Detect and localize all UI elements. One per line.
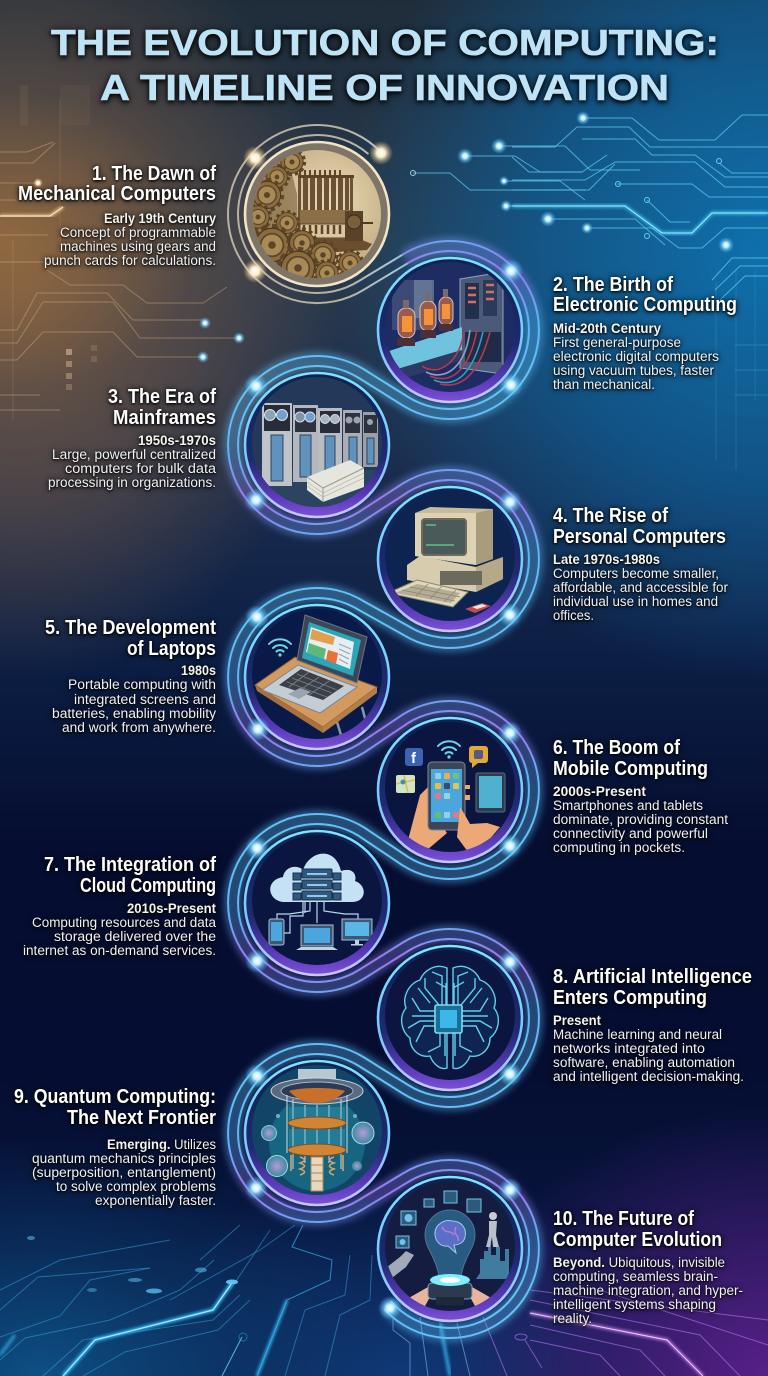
text: step 5: integrated screens and [74, 692, 216, 707]
text: step 6: connectivity and powerful [553, 826, 708, 841]
circuit traces: upper right (cyan) [413, 115, 768, 470]
text: step 6: computing in pockets. [553, 840, 685, 855]
text: step 10: 10. The Future of [553, 1208, 694, 1230]
rail line B [238, 241, 539, 1338]
text: step 9: exponentially faster. [95, 1193, 216, 1208]
text: step 2: First general-purpose [553, 335, 681, 350]
text: step 8: Enters Computing [553, 987, 707, 1009]
icon: vacuum tubes [378, 258, 522, 402]
rail segment: copper start [228, 125, 408, 303]
text: step 5: 1980s [181, 663, 216, 678]
text: step 2: 2. The Birth of [553, 274, 673, 296]
text: step 6: 2000s-Present [553, 784, 647, 799]
text: step 5 [45, 617, 216, 735]
text: step 3 [48, 386, 217, 490]
title line 1: THE EVOLUTION OF COMPUTING: [51, 22, 719, 63]
blue soft nodes [27, 1236, 238, 1294]
text: step 9: to solve complex problems [56, 1179, 216, 1194]
text: step 10: computing, seamless brain- [553, 1269, 718, 1284]
text: step 4: affordable, and accessible for [553, 580, 728, 595]
icon: cloud network [245, 831, 389, 975]
text: step 3: Large, powerful centralized [52, 447, 216, 462]
text: step 8: 8. Artificial Intelligence [553, 966, 752, 988]
text: step 1: Concept of programmable [60, 225, 216, 240]
serpentine timeline rail [228, 125, 539, 1338]
bright blue traces [0, 1283, 450, 1376]
text: step 4: 4. The Rise of [553, 505, 668, 527]
text: step 10 [553, 1208, 743, 1326]
serpentine rail glow [228, 241, 539, 1338]
text: step 8: and intelligent decision-making. [553, 1069, 744, 1084]
text: step 9: 9. Quantum Computing: [14, 1086, 216, 1108]
icon: quantum computer [245, 1061, 389, 1205]
text: step 3: 3. The Era of [108, 386, 216, 408]
text: step 4: offices. [553, 608, 594, 623]
title line 2: A TIMELINE OF INNOVATION [100, 67, 669, 108]
text: step 10: reality. [553, 1311, 592, 1326]
violet glow trace [530, 1313, 703, 1376]
text: step 6: 6. The Boom of [553, 737, 680, 759]
text: step 4: individual use in homes and [553, 594, 718, 609]
cyan glow traces [512, 173, 768, 245]
text: step 4 [553, 505, 728, 623]
text: step 10: Beyond. Ubiquitous, invisible [553, 1255, 725, 1270]
text: step 10: intelligent systems shaping [553, 1297, 716, 1312]
text: step 9: Emerging. Utilizes [107, 1137, 216, 1152]
text: step 2: electronic digital computers [553, 349, 719, 364]
text: step 6: Mobile Computing [553, 758, 708, 780]
text: step 3: processing in organizations. [48, 475, 216, 490]
icon: mechanical computer [245, 142, 389, 286]
text: step 4: Personal Computers [553, 526, 726, 548]
text: step 7 [23, 854, 216, 958]
text: step 4: Computers become smaller, [553, 566, 719, 581]
circuit traces: lower right (violet) [393, 1290, 768, 1376]
text: step 10: machine integration, and hyper- [553, 1283, 743, 1298]
text: step 2 [553, 274, 737, 392]
text: step 3: 1950s-1970s [138, 433, 216, 448]
text: step 8 [553, 966, 752, 1084]
circuit traces: upper left (copper) [0, 100, 238, 420]
text: step 2: Mid-20th Century [553, 321, 661, 336]
rail line A [228, 251, 529, 1328]
icon: AI brain chip [378, 946, 522, 1090]
text: step 5: batteries, enabling mobility [52, 706, 216, 721]
text: step 8: Present [553, 1013, 601, 1028]
icon: mobile devices [378, 718, 522, 862]
text: step 7: 7. The Integration of [44, 854, 216, 876]
title [51, 22, 719, 108]
text: step 8: Machine learning and neural [553, 1027, 722, 1042]
text: step 6: dominate, providing constant [553, 812, 728, 827]
text: step 9: (superposition, entanglement) [32, 1165, 216, 1180]
text: step 8: networks integrated into [553, 1041, 705, 1056]
text: step 5: Portable computing with [68, 677, 216, 692]
text: step 6: Smartphones and tablets [553, 798, 703, 813]
text: step 7: Cloud Computing [80, 875, 216, 897]
text: step 7: internet as on-demand services. [23, 943, 216, 958]
text: step 1: Early 19th Century [104, 211, 216, 226]
text: step 5: and work from anywhere. [62, 720, 216, 735]
text: step 5: 5. The Development [45, 617, 216, 639]
text: step 1 [18, 163, 216, 268]
text: step 4: Late 1970s-1980s [553, 552, 660, 567]
text: step 3: computers for bulk data [65, 461, 217, 476]
text: step 9 [14, 1086, 216, 1208]
text: step 2: than mechanical. [553, 377, 655, 392]
text: step 6 [553, 737, 728, 855]
text: step 9: The Next Frontier [67, 1107, 216, 1129]
icon: mainframes [245, 373, 389, 517]
text: step 2: using vacuum tubes, faster [553, 363, 714, 378]
text: step 8: software, enabling automation [553, 1055, 735, 1070]
text: step 1: punch cards for calculations. [44, 253, 216, 268]
text: step 5: of Laptops [127, 638, 216, 660]
text: step 1: machines using gears and [60, 239, 216, 254]
text: step 7: Computing resources and data [32, 915, 216, 930]
text: step 7: storage delivered over the [54, 929, 216, 944]
copper decorative squares [20, 85, 97, 390]
text: step 10: Computer Evolution [553, 1229, 722, 1251]
copper glow trace [0, 207, 63, 216]
icon: future hologram [378, 1177, 522, 1321]
icon: laptop [245, 605, 389, 749]
icon: mobile devices: f [411, 750, 417, 767]
text: step 7: 2010s-Present [127, 901, 216, 916]
text: step 1: 1. The Dawn of [92, 163, 216, 185]
circuit traces: lower left (blue) [0, 1225, 372, 1376]
icon: personal computer [378, 487, 522, 631]
circuit node dots [33, 111, 734, 363]
text: step 1: Mechanical Computers [18, 183, 216, 205]
text: step 2: Electronic Computing [553, 294, 737, 316]
ring junction dots [243, 141, 523, 1320]
rail segment: copper start inner [238, 135, 403, 293]
text: step 9: quantum mechanics principles [32, 1151, 216, 1166]
text: step 3: Mainframes [113, 407, 216, 429]
